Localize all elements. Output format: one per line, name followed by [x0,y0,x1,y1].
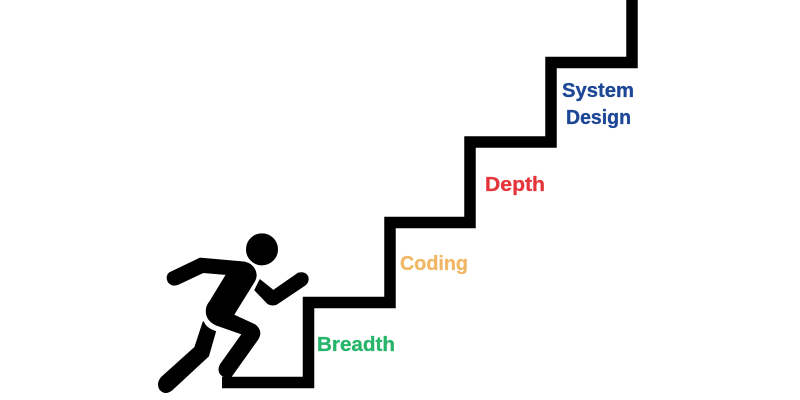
label: Depth: Depth [485,174,545,196]
front arm [255,273,308,305]
staircase [222,0,632,382]
icon: running person [159,234,308,392]
body with back arm and front leg [167,258,260,377]
label: System Design: Design [566,107,631,129]
label: Breadth: Breadth [317,334,395,356]
label: System Design [562,80,634,129]
back leg [159,322,215,392]
label: Coding: Coding [400,253,468,275]
label: System Design: System [562,80,634,102]
head [247,234,277,265]
